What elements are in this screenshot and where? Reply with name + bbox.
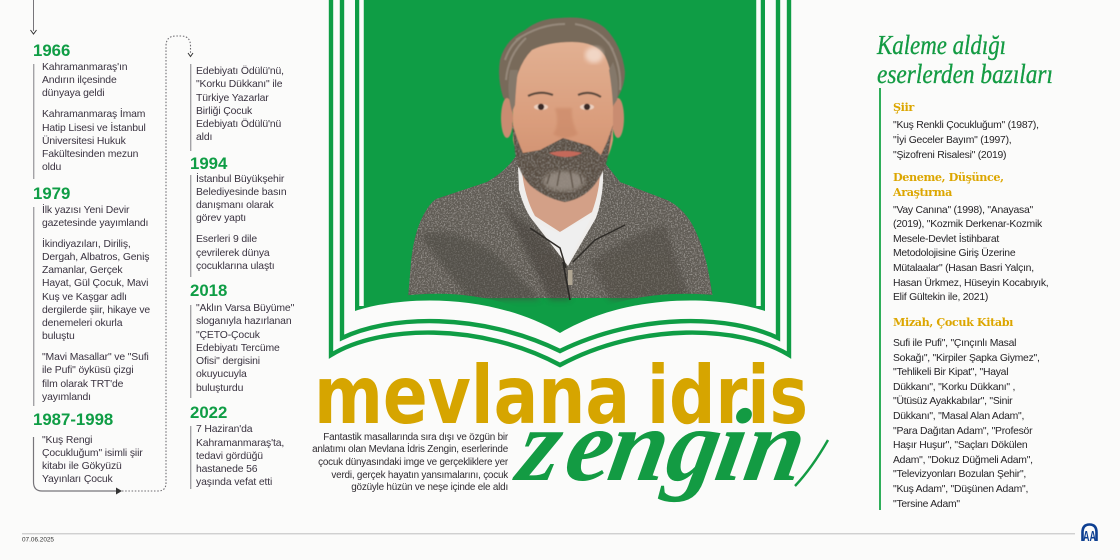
works: Şiir: "İyi Geceler Bayım" (1997), bbox=[893, 135, 1011, 146]
timeline entry: 2022 bbox=[190, 403, 284, 488]
timeline entry: 2022: 2022 bbox=[190, 403, 227, 422]
timeline entry: 1966: Hatip Lisesi ve İstanbul bbox=[42, 123, 146, 134]
timeline entry: 2022: Kahramanmaraş'ta, bbox=[196, 438, 284, 449]
timeline entry: award continuation: "Korku Dükkanı" ile bbox=[196, 79, 282, 90]
timeline entry: 1979: Dergah, Albatros, Geniş bbox=[42, 252, 149, 263]
timeline entry: 1979: "Mavi Masallar" ve "Sufi bbox=[42, 352, 149, 363]
works: Mizah, Çocuk Kitabı: Haşır Huşur", "Saçları Dökülen bbox=[893, 440, 1027, 451]
timeline entry: 1994: İstanbul Büyükşehir bbox=[196, 174, 284, 185]
timeline entry: award continuation: Birliği Çocuk bbox=[196, 106, 252, 117]
works: Deneme, Düşünce, Araştırma: Metodolojisine Giriş Üzerine bbox=[893, 248, 1015, 259]
works: Mizah, Çocuk Kitabı: Dükkanı", "Korku Dükkanı" , bbox=[893, 382, 1015, 393]
works panel rule bbox=[879, 88, 881, 510]
works: Mizah, Çocuk Kitabı: "Televizyonları Bozulan Şehir", bbox=[893, 469, 1026, 480]
timeline entry: 1966: Andırın ilçesinde bbox=[42, 75, 117, 86]
timeline entry: 1994: çevrilerek dünya bbox=[196, 248, 270, 259]
timeline entry: 1979: 1979 bbox=[33, 184, 70, 203]
timeline entry: 1994: çocuklarına ulaştı bbox=[196, 261, 275, 272]
works: Mizah, Çocuk Kitabı: Dükkanı", "Masal Alan Adam", bbox=[893, 411, 1024, 422]
works: Deneme, Düşünce, Araştırma: Deneme, Düşünce, bbox=[893, 170, 1004, 184]
timeline entry: 2018: 2018 bbox=[190, 281, 227, 300]
works: Deneme, Düşünce, Araştırma: "Vay Canına" (1998), "Anayasa" bbox=[893, 205, 1033, 216]
timeline entry: award continuation: aldı bbox=[196, 132, 212, 143]
timeline entry: 1979: gazetesinde yayımlandı bbox=[42, 218, 148, 229]
timeline entry: award continuation: Edebiyatı Ödülü'nü bbox=[196, 119, 281, 130]
timeline entry: 2022: tedavi gördüğü bbox=[196, 451, 263, 462]
timeline entry: 1987-1998 bbox=[33, 410, 143, 485]
footer rule bbox=[22, 533, 1075, 534]
works: Deneme, Düşünce, Araştırma: Mütalaalar" (Hasan Basri Yalçın, bbox=[893, 263, 1034, 274]
timeline entry: 1966: dünyaya geldi bbox=[42, 88, 104, 99]
timeline entry: award continuation: Türkiye Yazarlar bbox=[196, 92, 269, 104]
timeline entry: 1979: ile Pufi" öyküsü çizgi bbox=[42, 365, 134, 376]
timeline entry: 1966: Fakültesinden mezun bbox=[42, 149, 138, 160]
works: Mizah, Çocuk Kitabı: "Kuş Adam", "Düşünen Adam", bbox=[893, 484, 1028, 495]
biography summary: verdi, gerçek hayatın yansımalarını, çocuk bbox=[331, 470, 508, 481]
timeline entry: 1966: Üniversitesi Hukuk bbox=[42, 136, 126, 147]
timeline entry: 1987-1998: kitabı ile Gökyüzü bbox=[42, 461, 122, 472]
timeline entry: 1979: İkindiyazıları, Diriliş, bbox=[42, 239, 131, 250]
biography summary: Fantastik masallarında sıra dışı ve özgün bir bbox=[323, 432, 508, 442]
works: Deneme, Düşünce, Araştırma: (2019), "Kozmik Derkenar-Kozmik bbox=[893, 219, 1042, 230]
timeline entry: 1979: Zamanlar, Gerçek bbox=[42, 265, 122, 276]
timeline entry: 1987-1998: Yayınları Çocuk bbox=[42, 474, 113, 485]
timeline entry: 2018: okuyucuyla bbox=[196, 369, 247, 380]
works: Deneme, Düşünce, Araştırma: Hasan Ürkmez, Hüseyin Kocabıyık, bbox=[893, 278, 1048, 289]
works heading: eserlerden bazıları bbox=[877, 59, 1053, 89]
timeline entry: 2018: buluşturdu bbox=[196, 382, 243, 394]
book frame: green page with stripes bbox=[331, 0, 789, 365]
timeline entry: 2018: sloganıyla hazırlanan bbox=[196, 316, 291, 327]
timeline entry: 2022: hastanede 56 bbox=[196, 464, 257, 475]
date: 07.06.2025 bbox=[22, 536, 54, 544]
timeline entry: 1966: 1966 bbox=[33, 41, 70, 60]
timeline entry: 1979: denemeleri okurla bbox=[42, 318, 122, 329]
timeline entry: 1966: Kahramanmaraş İmam bbox=[42, 109, 145, 120]
timeline entry: 1979: dergilerde şiir, hikaye ve bbox=[42, 305, 150, 316]
timeline entry: 1979 bbox=[33, 184, 150, 403]
timeline entry: 2018: Edebiyatı Tercüme bbox=[196, 343, 280, 354]
timeline entry: 1979: film olarak TRT'de bbox=[42, 378, 123, 390]
works: Şiir bbox=[893, 100, 1039, 161]
timeline entry: 1966: Kahramanmaraş'ın bbox=[42, 62, 127, 73]
timeline arrows bbox=[30, 0, 193, 494]
title: zengin: zengin bbox=[508, 388, 815, 503]
works: Şiir: Şiir bbox=[893, 100, 914, 114]
timeline entry: 1994: danışmanı olarak bbox=[196, 200, 274, 211]
timeline bars bbox=[33, 64, 191, 489]
timeline entry: 1979: İlk yazısı Yeni Devir bbox=[42, 204, 129, 216]
works: Deneme, Düşünce, Araştırma: Elif Gültekin ile, 2021) bbox=[893, 292, 988, 303]
biography summary: anlatımı olan Mevlana İdris Zengin, eserlerinde bbox=[312, 444, 508, 455]
timeline entry: award continuation: Edebiyatı Ödülü'nü, bbox=[196, 66, 284, 77]
biography summary bbox=[312, 432, 508, 493]
works: Mizah, Çocuk Kitabı: "Tersine Adam" bbox=[893, 499, 960, 510]
timeline entry: 1994: görev yaptı bbox=[196, 213, 246, 224]
title: mevlana idris: mevlana bbox=[314, 349, 630, 442]
works: Şiir: "Şizofreni Risalesi" (2019) bbox=[893, 150, 1006, 161]
works: Mizah, Çocuk Kitabı: "Ütüsüz Ayakkabılar", "Sinir bbox=[893, 396, 1012, 407]
timeline entry: 1979: Hayat, Gül Çocuk, Mavi bbox=[42, 278, 148, 289]
timeline entry: 2018: Ofisi" dergisini bbox=[196, 356, 260, 367]
timeline entry: 1987-1998: Çocukluğum" isimli şiir bbox=[42, 448, 143, 459]
timeline entry: 1966 bbox=[33, 41, 146, 173]
timeline entry: award continuation bbox=[196, 66, 284, 143]
timeline entry: 2022: yaşında vefat etti bbox=[196, 477, 272, 488]
AA logo bbox=[1082, 524, 1096, 545]
works: Deneme, Düşünce, Araştırma: Araştırma bbox=[893, 185, 952, 199]
title: mevlana idris: idris bbox=[647, 349, 808, 442]
biography summary: çocuk dünyasındaki imge ve gerçekliklere yer bbox=[318, 457, 508, 468]
timeline entry: 2022: 7 Haziran'da bbox=[196, 424, 252, 435]
timeline entry: 1994: 1994 bbox=[190, 154, 227, 173]
works heading bbox=[876, 30, 1053, 89]
works: Şiir: "Kuş Renkli Çocukluğum" (1987), bbox=[893, 120, 1039, 131]
timeline entry: 1994: Eserleri 9 dile bbox=[196, 234, 257, 245]
timeline entry: 1994: Belediyesinde basın bbox=[196, 187, 287, 198]
works: Mizah, Çocuk Kitabı: "Tehlikeli Bir Kipat", "Hayal bbox=[893, 367, 1008, 378]
timeline entry: 1979: buluştu bbox=[42, 331, 75, 342]
works: Mizah, Çocuk Kitabı: "Para Dağıtan Adam", "Profesör bbox=[893, 426, 1032, 437]
works: Mizah, Çocuk Kitabı: Mizah, Çocuk Kitabı bbox=[893, 315, 1013, 329]
works: Mizah, Çocuk Kitabı: Adam", "Dokuz Düğmeli Adam", bbox=[893, 455, 1033, 466]
works heading: Kaleme aldığı bbox=[876, 30, 1006, 60]
works: Mizah, Çocuk Kitabı: Sufi ile Pufi", "Çınçınlı Masal bbox=[893, 338, 1016, 349]
timeline entry: 1979: Kuş ve Kaşgar adlı bbox=[42, 292, 127, 303]
timeline entry: 2018: "Aklın Varsa Büyüme" bbox=[196, 303, 294, 314]
timeline entry: 1987-1998: 1987-1998 bbox=[33, 410, 113, 429]
timeline entry: 1979: yayımlandı bbox=[42, 392, 91, 403]
works: Deneme, Düşünce, Araştırma: Mesele-Devlet İstihbarat bbox=[893, 234, 999, 245]
timeline entry: 2018 bbox=[190, 281, 294, 394]
timeline entry: 1994 bbox=[190, 154, 287, 272]
timeline entry: 1966: oldu bbox=[42, 162, 61, 173]
biography summary: gözüyle hüzün ve neşe içinde ele aldı bbox=[351, 482, 508, 493]
AA logo: AA bbox=[1083, 529, 1096, 545]
works: Mizah, Çocuk Kitabı: Sokağı", "Kirpiler Şapka Giymez", bbox=[893, 353, 1040, 364]
portrait of Mevlana İdris Zengin bbox=[408, 17, 713, 300]
works: Deneme, Düşünce, Araştırma bbox=[892, 170, 1048, 303]
timeline entry: 2018: "ÇETO-Çocuk bbox=[196, 330, 260, 340]
timeline entry: 1987-1998: "Kuş Rengi bbox=[42, 434, 92, 446]
